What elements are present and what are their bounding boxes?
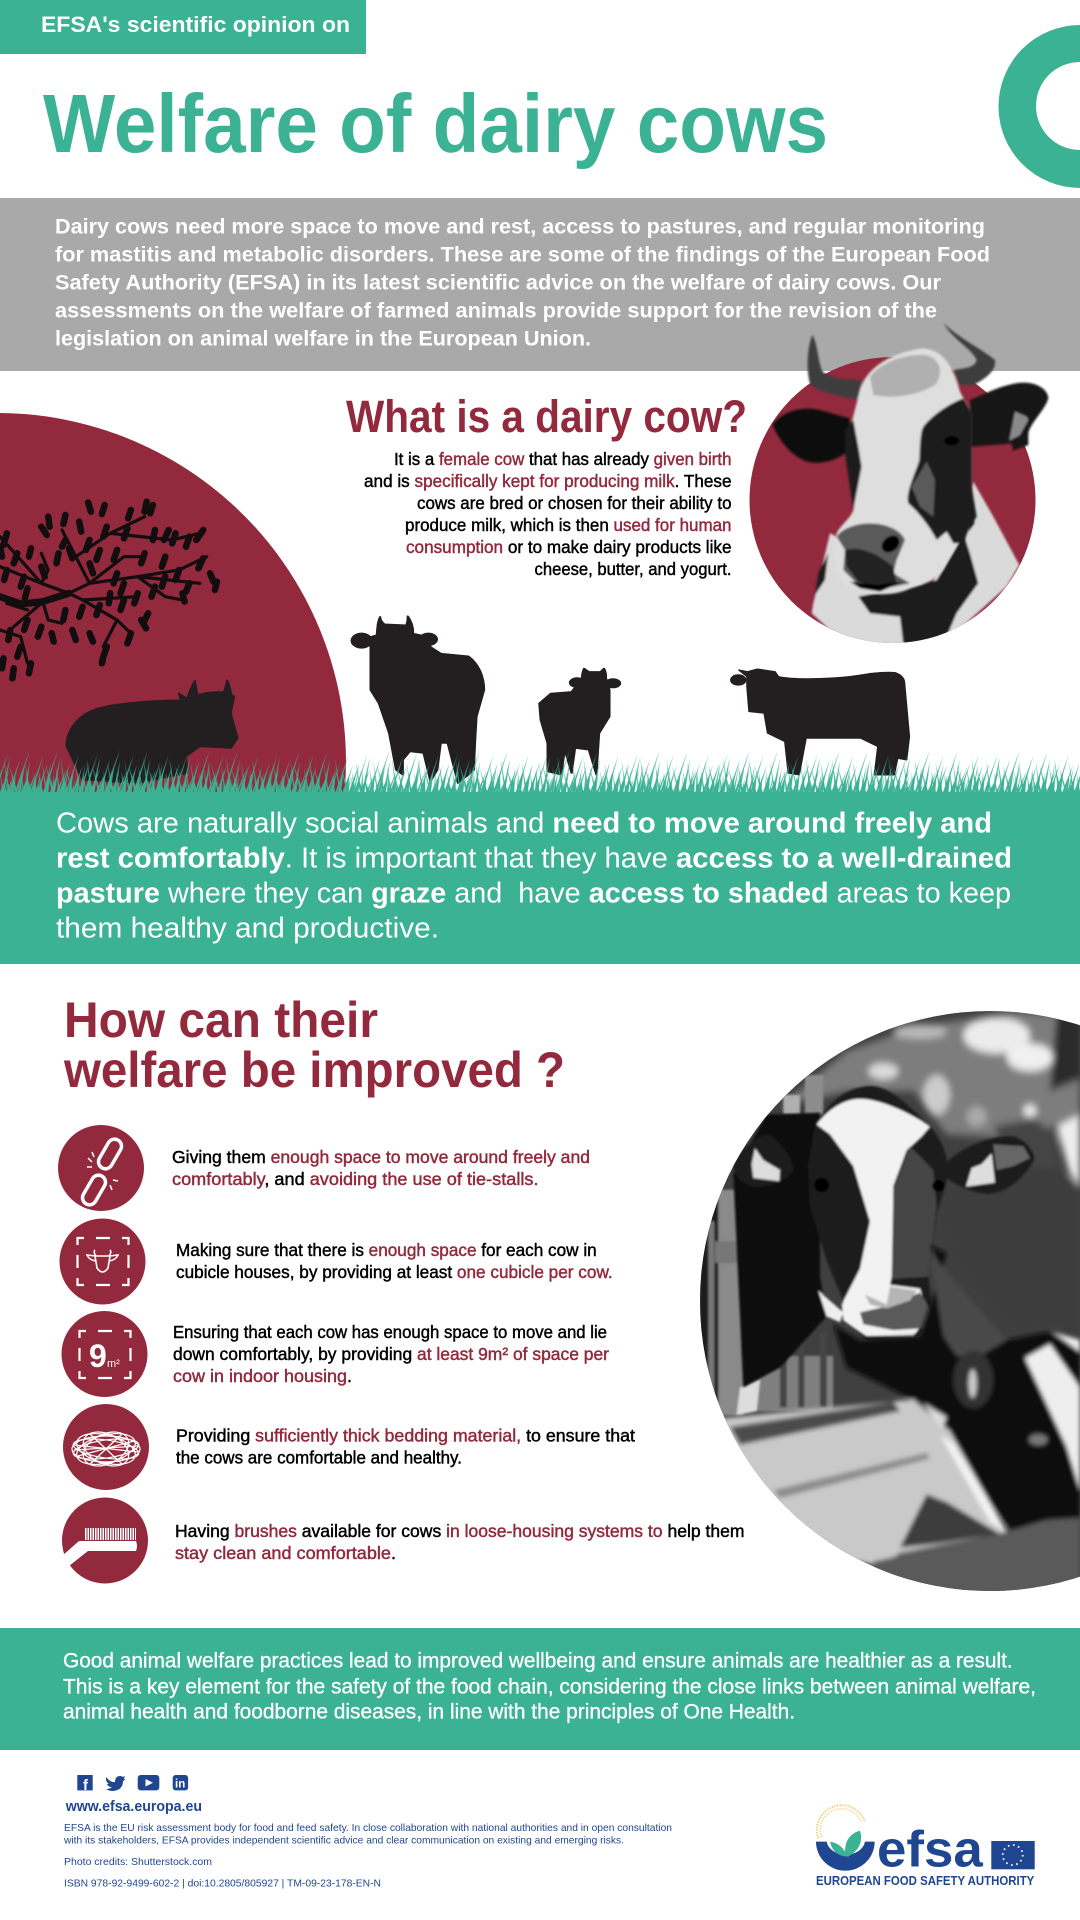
footer text block: ISBN 978-92-9499-602-2 | doi:10.2805/805927 | TM-09-23-178-EN-N [64, 1878, 381, 1890]
item 3: 9 square metres icon: m² [107, 1358, 120, 1370]
item 3: 9 square metres icon: 9 [89, 1338, 107, 1374]
social media icons [77, 1775, 188, 1794]
item 4 text [176, 1426, 635, 1468]
panel: green band about social animals: pasture where they can graze and have access to shaded areas to keep [56, 878, 1011, 910]
panel: intro gray band: for mastitis and metabolic disorders. These are some of the findings of the European Food [55, 242, 990, 266]
item 2 text: Making sure that there is enough space for each cow in [176, 1240, 597, 1260]
item 4: bedding nest icon [63, 1404, 149, 1490]
text block: dairy cow definition: It is a female cow that has already given birth [394, 449, 732, 469]
EFSA logo: EUROPEAN FOOD SAFETY AUTHORITY [816, 1873, 1035, 1888]
item 3 text: cow in indoor housing . [173, 1366, 352, 1386]
panel: bottom green conclusion band: Good animal welfare practices lead to improved wellbeing and ensure animals are healthier as a result. [63, 1650, 1013, 1673]
icon: small standing cow silhouette [539, 668, 621, 775]
social media icons: f [83, 1777, 89, 1794]
photo: two cows in barn in circle [700, 1011, 1080, 1591]
text block: dairy cow definition [364, 449, 732, 579]
text block: dairy cow definition: consumption or to make dairy products like [406, 537, 732, 557]
icon: large standing cow silhouette [351, 616, 484, 783]
item 5 text [175, 1521, 744, 1563]
footer text block: EFSA is the EU risk assessment body for food and feed safety. In close collaboration with national authorities and in open consultation [64, 1822, 672, 1834]
footer text block [63, 1822, 672, 1890]
panel: intro gray band: assessments on the welfare of farmed animals provide support for the revision of the [55, 298, 937, 322]
item 5 text: stay clean and comfortable . [175, 1543, 396, 1563]
social media icons: in [175, 1778, 185, 1790]
panel: intro gray band: Safety Authority (EFSA) in its latest scientific advice on the welfare of dairy cows. Our [55, 270, 942, 294]
panel: bottom green conclusion band [0, 1628, 1080, 1750]
large maroon sun circle [0, 413, 346, 795]
footer text block: with its stakeholders, EFSA provides independent scientific advice and clear communication on existing and emerging risks. [63, 1834, 624, 1846]
panel: bottom green conclusion band: animal health and foodborne diseases, in line with the principles of One Health. [63, 1701, 795, 1724]
item 1 text [172, 1147, 590, 1189]
heading: How can their welfare be improved ? [63, 992, 565, 1098]
photo: cow head on maroon circle [750, 323, 1048, 645]
item 5 text: Having brushes available for cows in loose-housing systems to help them [175, 1521, 744, 1541]
item 1 text: Giving them enough space to move around freely and [172, 1147, 590, 1167]
header tag: EFSA's scientific opinion on: EFSA's scientific opinion on [41, 12, 350, 37]
heading: How can their welfare be improved ?: How can their [64, 992, 378, 1048]
panel: green band about social animals: them healthy and productive. [56, 912, 439, 944]
text block: dairy cow definition: and is specifically kept for producing milk. These [364, 471, 732, 491]
footer text block: Photo credits: Shutterstock.com [64, 1856, 212, 1868]
panel: green band about social animals [0, 792, 1080, 964]
heading: How can their welfare be improved ?: welfare be improved ? [63, 1042, 565, 1098]
item 4 text: Providing sufficiently thick bedding material, to ensure that [176, 1426, 635, 1446]
header tag: EFSA's scientific opinion on [0, 0, 366, 54]
website link: www.efsa.europa.eu [65, 1798, 202, 1815]
text block: dairy cow definition: cheese, butter, and yogurt. [534, 559, 732, 579]
item 5: brush icon [62, 1498, 148, 1584]
text block: dairy cow definition: cows are bred or chosen for their ability to [417, 493, 732, 513]
panel: bottom green conclusion band: This is a key element for the safety of the food chain, considering the close links between animal welfare, [63, 1675, 1036, 1698]
item 1 text: comfortably, and avoiding the use of tie-stalls. [172, 1169, 538, 1189]
icon: lying cow silhouette [67, 680, 238, 783]
item 4 text: the cows are comfortable and healthy. [176, 1448, 462, 1468]
icon: tree silhouette [0, 502, 217, 678]
EFSA logo: efsa [877, 1821, 983, 1878]
item 3 text [173, 1322, 609, 1386]
item 3 text: Ensuring that each cow has enough space to move and lie [173, 1322, 607, 1342]
item 2 text [176, 1240, 613, 1282]
EFSA logo [816, 1805, 1035, 1888]
item 3: 9 square metres icon [62, 1311, 148, 1397]
icon: side-on cow silhouette [730, 669, 909, 775]
item 2 text: cubicle houses, by providing at least one cubicle per cow. [176, 1262, 613, 1282]
grass strip [0, 745, 1080, 808]
item 2: cubicle icon [60, 1218, 146, 1304]
heading: What is a dairy cow?: What is a dairy cow? [346, 391, 747, 442]
title: Welfare of dairy cows [43, 77, 828, 170]
panel: green band about social animals: rest comfortably. It is important that they have access to a well-drained [56, 842, 1012, 874]
item 3 text: down comfortably, by providing at least 9m² of space per [173, 1344, 609, 1364]
item 1: chain icon [58, 1125, 144, 1211]
decorative green ring [998, 25, 1080, 188]
panel: intro gray band [0, 198, 1080, 371]
panel: intro gray band: Dairy cows need more space to move and rest, access to pastures, and regular monitoring [55, 214, 985, 238]
panel: intro gray band: legislation on animal welfare in the European Union. [55, 326, 591, 350]
panel: green band about social animals: Cows are naturally social animals and need to move around freely and [56, 808, 992, 840]
text block: dairy cow definition: produce milk, which is then used for human [405, 515, 732, 535]
